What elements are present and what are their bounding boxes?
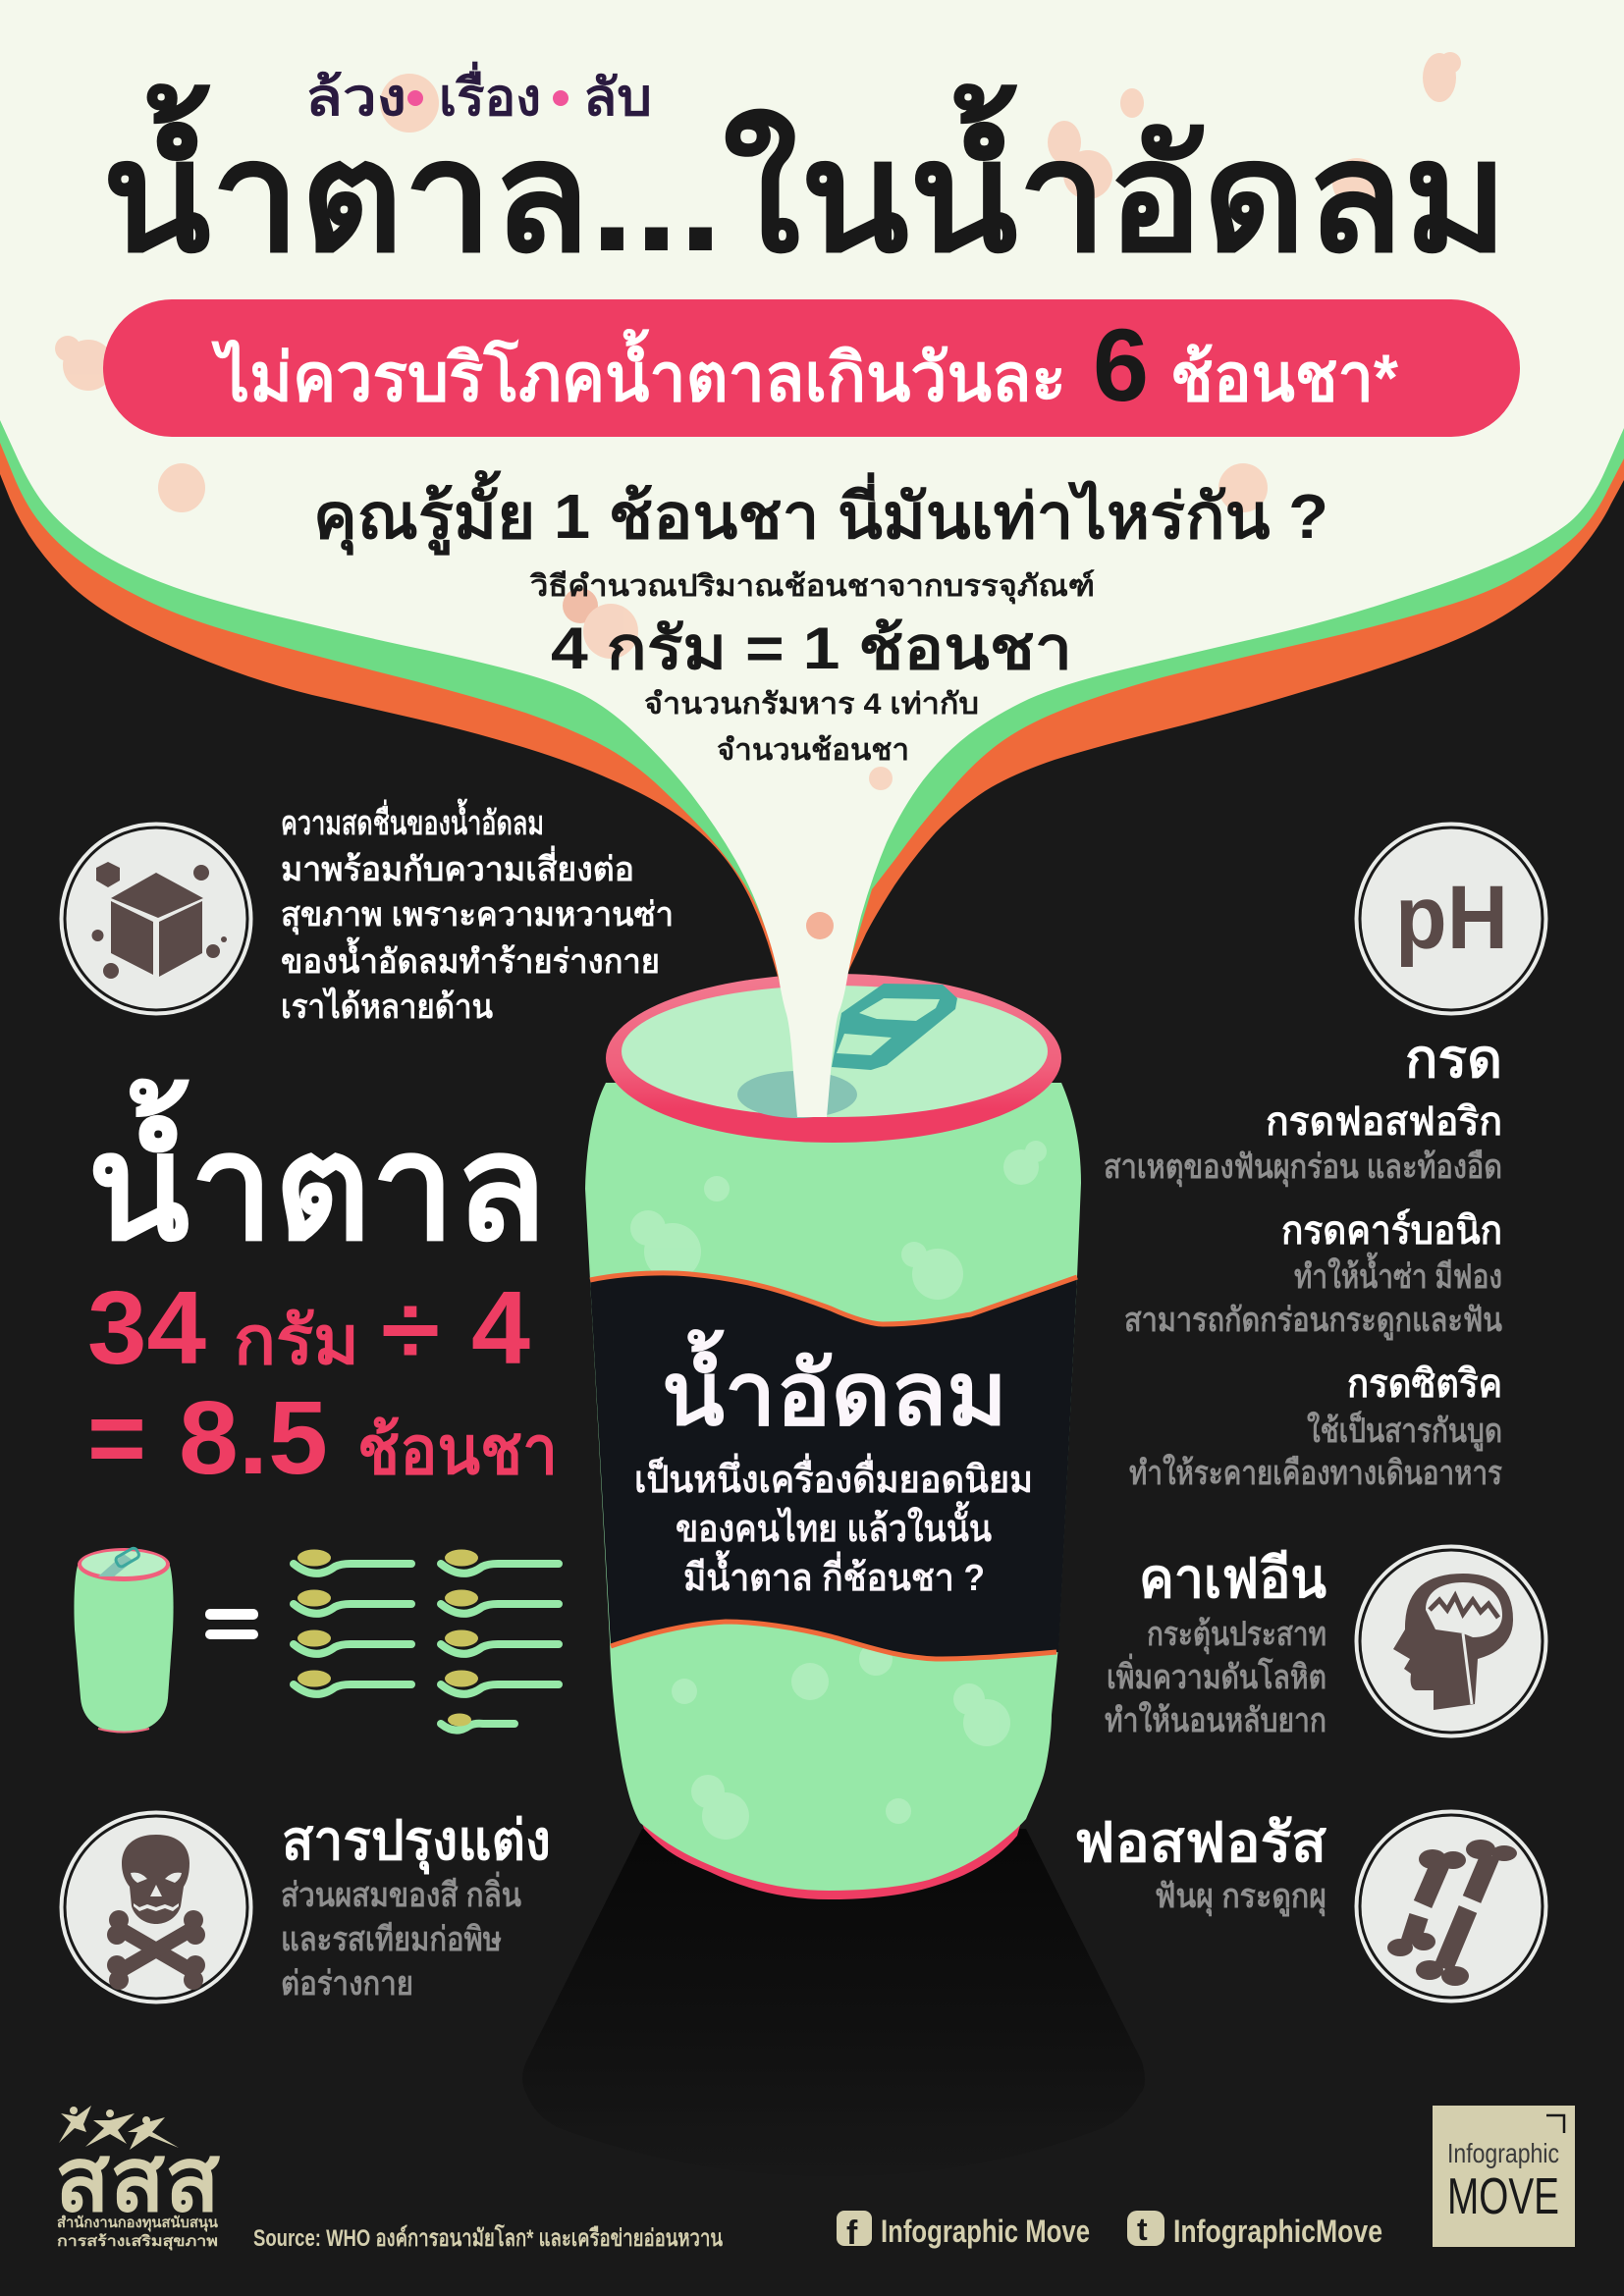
logo: ThaiHealth: สำนักงานกองทุนสนับสนุน	[57, 2215, 219, 2232]
sugar calculation: =	[87, 1380, 146, 1496]
phosphorus heading: ฟอสฟอรัส	[1074, 1811, 1327, 1873]
can shadow	[522, 1829, 1145, 2176]
phosphoric acid: กรดฟอสฟอริก	[1266, 1100, 1502, 1144]
carbonic acid: สามารถกัดกร่อนกระดูกและฟัน	[1124, 1302, 1502, 1341]
formula note	[644, 688, 979, 767]
icon: broken bones	[1357, 1812, 1545, 2001]
phosphoric acid	[1104, 1100, 1502, 1188]
callout pill: ช้อนชา*	[1170, 341, 1399, 415]
pull tab	[832, 984, 957, 1070]
additives heading: สารปรุงแต่ง	[282, 1809, 551, 1875]
intro text: ความสดชื่นของน้ำอัดลม	[281, 798, 544, 842]
icon: head with brain	[1357, 1547, 1545, 1735]
sugar heading: น้ำตาล	[87, 1078, 547, 1271]
intro text	[281, 798, 674, 1026]
callout pill: 6	[1093, 308, 1149, 423]
additives text: ส่วนผสมของสี กลิ่น	[281, 1871, 521, 1914]
small can	[74, 1547, 174, 1733]
sugar calculation: กรัม	[234, 1304, 359, 1378]
can label text	[634, 1453, 1033, 1599]
sugar calculation: 8.5	[179, 1380, 328, 1496]
phosphoric acid: สาเหตุของฟันผุกร่อน และท้องอืด	[1104, 1148, 1502, 1188]
orange pour band	[0, 0, 1624, 1028]
can bubbles	[630, 1141, 1047, 1840]
can dark label	[590, 1273, 1077, 1659]
floating sugar bubbles	[55, 52, 1461, 939]
can label bottom edge	[611, 1622, 1056, 1659]
acid heading: กรด	[1405, 1030, 1502, 1089]
sugar calculation: 34	[87, 1270, 206, 1386]
citric acid: ทำให้ระคายเคืองทางเดินอาหาร	[1129, 1453, 1503, 1492]
citric acid: ใช้เป็นสารกันบูด	[1307, 1410, 1502, 1452]
carbonic acid: กรดคาร์บอนิก	[1281, 1208, 1502, 1253]
logo: ThaiHealth: การสร้างเสริมสุขภาพ	[57, 2232, 218, 2251]
logo: Infographic Move	[1433, 2106, 1575, 2247]
facebook link: Infographic Move	[881, 2214, 1090, 2249]
can opening	[737, 1071, 857, 1118]
equals sign	[205, 1609, 258, 1639]
logo: ThaiHealth	[55, 2106, 221, 2251]
twitter link: InfographicMove	[1173, 2214, 1382, 2249]
can top	[622, 986, 1048, 1117]
formula note: จำนวนช้อนชา	[717, 734, 909, 767]
caffeine text: เพิ่มความดันโลหิต	[1107, 1653, 1326, 1696]
can label top edge	[590, 1273, 1077, 1324]
soda can	[585, 974, 1081, 1899]
sugar calculation: 4	[471, 1270, 530, 1386]
can base rim	[628, 1787, 1031, 1899]
can label title: น้ำอัดลม	[662, 1329, 1007, 1444]
can body	[585, 1083, 1081, 1891]
citric acid	[1129, 1362, 1503, 1492]
callout pill: ไม่ควรบริโภคน้ำตาลเกินวันละ	[211, 328, 1066, 415]
caffeine text: กระตุ้นประสาท	[1147, 1616, 1326, 1655]
carbonic acid	[1124, 1208, 1502, 1341]
formula note: จำนวนกรัมหาร 4 เท่ากับ	[644, 688, 979, 721]
can label text: มีน้ำตาล กี่ช้อนชา ?	[683, 1550, 985, 1599]
can rim	[606, 974, 1061, 1143]
icon: sugar cube	[61, 825, 251, 1013]
sugar calculation: ÷	[381, 1275, 440, 1385]
intro text: มาพร้อมกับความเสี่ยงต่อ	[281, 845, 634, 888]
calculation method: วิธีคำนวณปริมาณช้อนชาจากบรรจุภัณฑ์	[529, 569, 1095, 605]
cream pour shape	[0, 0, 1624, 1117]
question heading: คุณรู้มั้ย 1 ช้อนชา นี่มันเท่าไหร่กัน ?	[313, 470, 1328, 556]
additives text	[281, 1871, 521, 2002]
sugar calculation	[87, 1270, 558, 1496]
title: น้ำตาล...ในน้ำอัดลม	[102, 83, 1508, 284]
teaspoon icons	[294, 1549, 559, 1731]
subtitle: เรื่อง	[439, 62, 541, 127]
caffeine text	[1105, 1616, 1326, 1739]
facebook link: f	[846, 2215, 858, 2252]
sugar calculation: ช้อนชา	[357, 1414, 558, 1488]
icon: pH: pH	[1395, 868, 1508, 968]
intro text: เราได้หลายด้าน	[281, 987, 493, 1026]
subtitle	[305, 62, 652, 127]
twitter link	[1127, 2211, 1382, 2249]
logo: Infographic Move: MOVE	[1447, 2168, 1559, 2225]
logo: Infographic Move: Infographic	[1447, 2138, 1559, 2168]
phosphorus text: ฟันผุ กระดูกผุ	[1155, 1878, 1326, 1917]
logo: ThaiHealth: สสส	[55, 2130, 221, 2230]
intro text: สุขภาพ เพราะความหวานซ่า	[281, 896, 674, 935]
twitter link: t	[1137, 2212, 1148, 2247]
carbonic acid: ทำให้น้ำซ่า มีฟอง	[1294, 1252, 1502, 1296]
formula: 4 กรัม = 1 ช้อนชา	[551, 615, 1072, 681]
subtitle: ล้วง	[305, 70, 406, 127]
icon: pH	[1357, 825, 1545, 1013]
citric acid: กรดซิตริค	[1347, 1362, 1502, 1406]
green pour band	[0, 0, 1624, 957]
caffeine text: ทำให้นอนหลับยาก	[1105, 1700, 1326, 1739]
can label text: เป็นหนึ่งเครื่องดื่มยอดนิยม	[634, 1453, 1033, 1501]
subtitle: ลับ	[583, 70, 652, 127]
icon: skull and crossbones	[61, 1812, 251, 2002]
facebook link	[837, 2211, 1090, 2252]
intro text: ของน้ำอัดลมทำร้ายร่างกาย	[281, 936, 660, 981]
additives text: และรสเทียมก่อพิษ	[281, 1921, 502, 1958]
caffeine heading: คาเฟอีน	[1139, 1547, 1326, 1609]
additives text: ต่อร่างกาย	[281, 1965, 413, 2002]
callout pill	[103, 299, 1520, 437]
source: Source: WHO องค์การอนามัยโลก* และเครือข่ายอ่อนหวาน	[253, 2223, 723, 2252]
can label text: ของคนไทย แล้วในนั้น	[676, 1501, 992, 1550]
